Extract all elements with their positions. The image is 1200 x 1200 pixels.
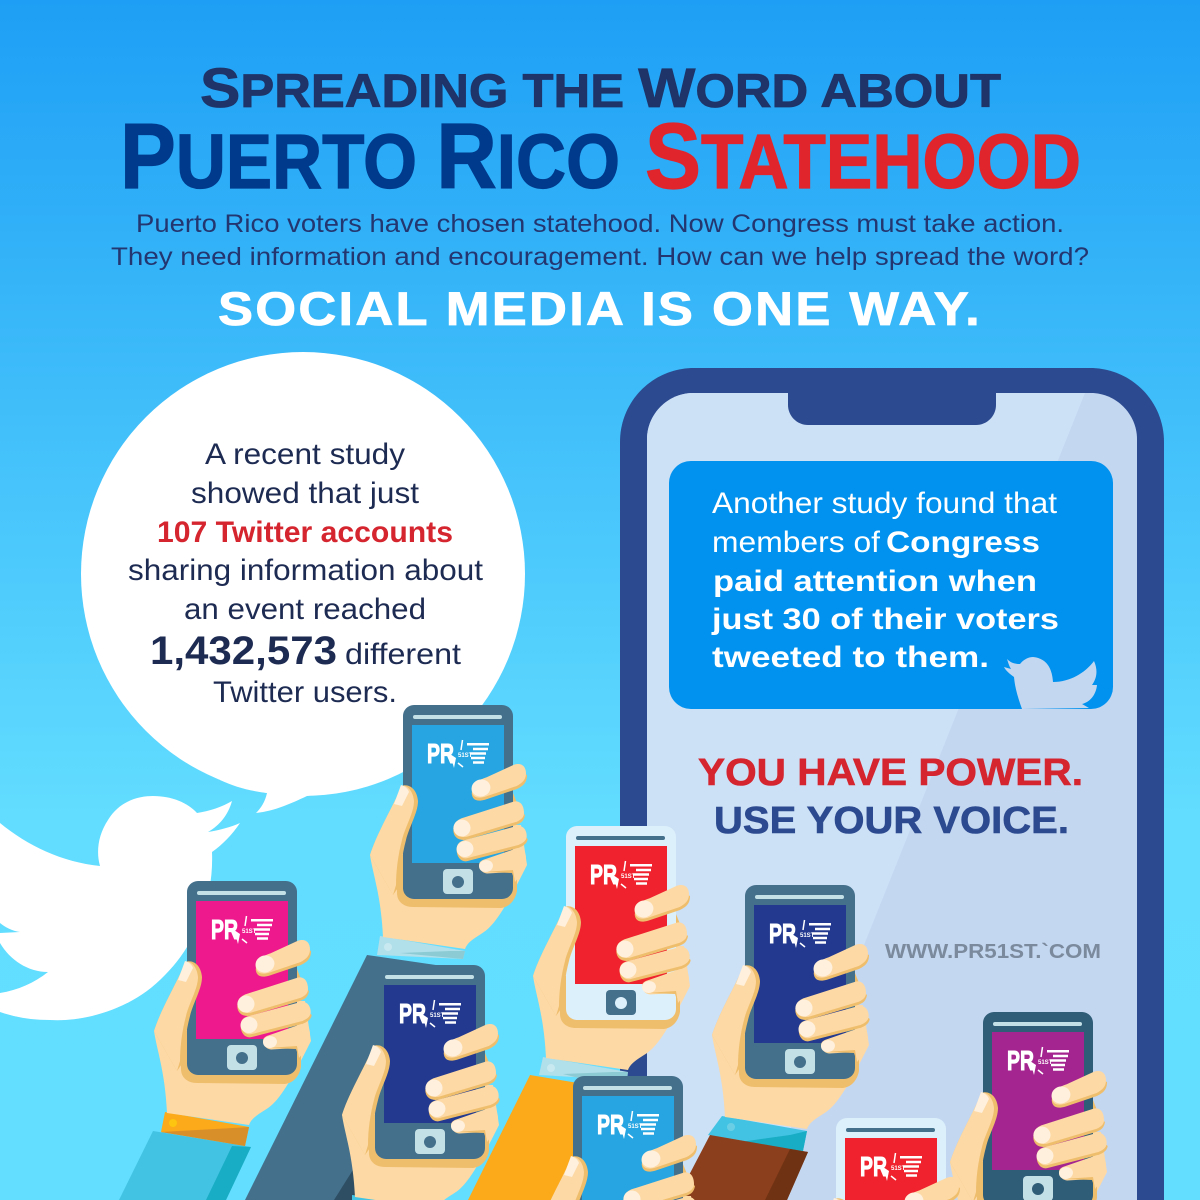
bubble text: different bbox=[345, 638, 462, 671]
bubble text: Twitter users. bbox=[213, 676, 397, 709]
hand: cyan screen phone: 51ST bbox=[458, 753, 473, 759]
panel: study message bbox=[669, 461, 1113, 709]
hand: cyan screen phone bottom: 51ST bbox=[628, 1124, 643, 1130]
message text: tweeted to them. bbox=[712, 641, 989, 674]
hand: red screen white phone bbox=[468, 826, 691, 1200]
message text bbox=[711, 487, 1059, 674]
hand: cyan screen phone bottom: PR bbox=[597, 1109, 624, 1140]
icon: small twitter bird bbox=[1004, 657, 1097, 709]
hand: pink screen phone: 51ST bbox=[242, 929, 257, 935]
intro text: They need information and encouragement. How can we help spread the word? bbox=[111, 243, 1089, 271]
message text: paid attention when bbox=[713, 565, 1037, 598]
hand: pink screen phone bbox=[119, 881, 312, 1200]
bubble text: sharing information about bbox=[128, 554, 484, 587]
hand: navy screen phone right bbox=[676, 885, 870, 1200]
bubble text: 107 Twitter accounts bbox=[157, 516, 453, 549]
message text: Another study found that bbox=[712, 487, 1058, 520]
call to action line 2: USE YOUR VOICE. bbox=[714, 800, 1069, 842]
bubble text: an event reached bbox=[184, 593, 426, 626]
title line: Puerto Rico: PUERTO RICO bbox=[120, 104, 620, 208]
hand: cyan screen phone: PR bbox=[427, 738, 454, 769]
call to action: YOU HAVE POWER. bbox=[698, 752, 1083, 794]
title line: Statehood: STATEHOOD bbox=[645, 104, 1081, 208]
hand: navy screen phone right: PR bbox=[769, 918, 796, 949]
hand: red screen phone bottom bbox=[803, 1118, 961, 1200]
speech bubble bbox=[81, 352, 525, 813]
intro text bbox=[111, 210, 1089, 271]
bubble text: showed that just bbox=[191, 477, 420, 510]
bubble text: A recent study bbox=[205, 438, 405, 471]
hand: navy screen phone right: 51ST bbox=[800, 933, 815, 939]
icon: large twitter bird bbox=[0, 796, 240, 1020]
hand: red screen phone bottom: 51ST bbox=[891, 1166, 906, 1172]
bubble text: 1,432,573 bbox=[150, 629, 337, 673]
large phone bbox=[620, 368, 1164, 1200]
intro text: Puerto Rico voters have chosen statehood. Now Congress must take action. bbox=[136, 210, 1064, 238]
hand: purple screen phone: 51ST bbox=[1038, 1060, 1053, 1066]
hand: navy screen phone left: 51ST bbox=[430, 1013, 445, 1019]
website url: WWW.PR51ST.`COM bbox=[885, 941, 1101, 963]
hand: navy screen phone left bbox=[342, 965, 500, 1200]
hand: red screen white phone: PR bbox=[590, 859, 617, 890]
hand: cyan screen phone bbox=[245, 705, 528, 1200]
message text: members of bbox=[712, 526, 881, 559]
hand: pink screen phone: PR bbox=[211, 914, 238, 945]
hand: red screen white phone: 51ST bbox=[621, 874, 636, 880]
hand: cyan screen phone bottom bbox=[540, 1076, 698, 1200]
subheading: SOCIAL MEDIA IS ONE WAY. bbox=[218, 282, 982, 335]
hand: purple screen phone: PR bbox=[1007, 1045, 1034, 1076]
message text: Congress bbox=[886, 526, 1040, 559]
message text: just 30 of their voters bbox=[711, 603, 1059, 636]
hand: purple screen phone bbox=[950, 1012, 1108, 1200]
bubble text bbox=[128, 438, 484, 709]
title line: Spreading the Word about: SPREADING THE WORD ABOUT bbox=[200, 56, 1001, 119]
title bbox=[120, 56, 1081, 208]
hand: red screen phone bottom: PR bbox=[860, 1151, 887, 1182]
hand: navy screen phone left: PR bbox=[399, 998, 426, 1029]
